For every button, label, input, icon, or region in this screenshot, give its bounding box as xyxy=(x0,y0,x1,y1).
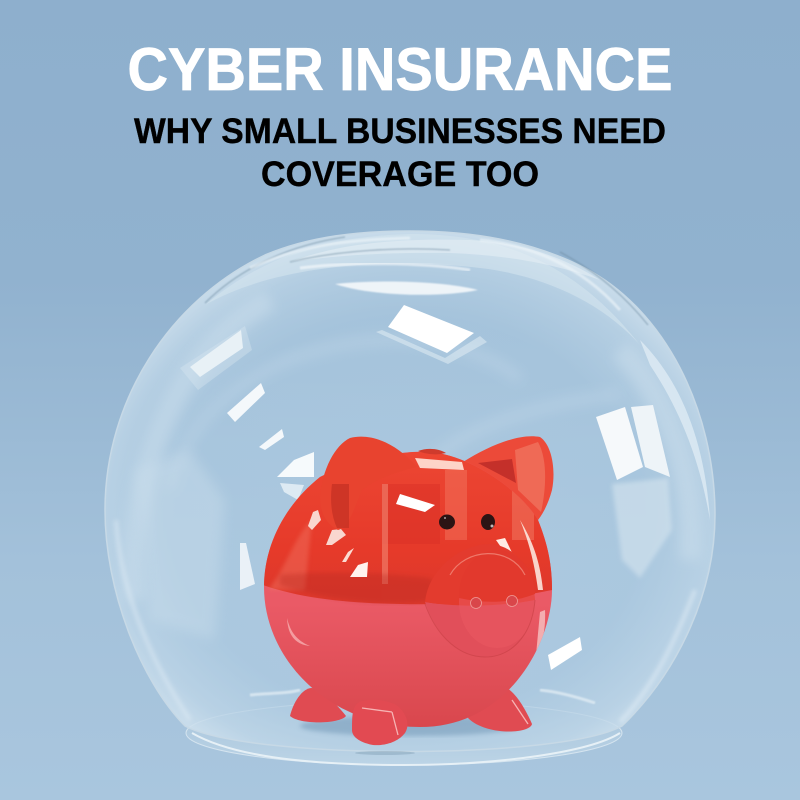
subtitle: WHY SMALL BUSINESSES NEED xyxy=(134,112,666,151)
glass top rim reflection xyxy=(205,234,640,345)
dome base plate xyxy=(186,701,622,765)
glass top dark rim detail xyxy=(205,237,648,325)
subtitle xyxy=(134,112,666,194)
window reflection: upper left xyxy=(190,330,243,377)
left side hazy reflections xyxy=(135,450,225,640)
right ear xyxy=(463,436,554,520)
right ear inner xyxy=(478,459,516,483)
glass inner wall shading xyxy=(134,300,691,600)
snout xyxy=(425,544,535,657)
low right reflection xyxy=(548,637,582,670)
title: CYBER INSURANCE xyxy=(128,36,672,103)
nostrils xyxy=(470,598,482,608)
window reflection: low left xyxy=(259,429,284,450)
eyes xyxy=(439,514,495,530)
glass dome xyxy=(105,231,715,765)
coin slot xyxy=(418,449,446,454)
window reflection: top xyxy=(388,305,474,353)
foot glints xyxy=(362,700,528,735)
left low reflection xyxy=(240,543,255,590)
subtitle: COVERAGE TOO xyxy=(261,155,539,194)
dome glass body xyxy=(105,231,715,752)
back feet xyxy=(290,685,532,732)
left ear xyxy=(320,437,417,530)
left ear inner reflection xyxy=(331,484,349,528)
base plate highlight rim xyxy=(192,733,620,765)
shadow xyxy=(300,716,520,736)
right edge highlight xyxy=(640,340,710,520)
glass top white highlight xyxy=(335,282,478,295)
pig body xyxy=(264,452,552,727)
front foot xyxy=(352,700,407,745)
top highlight stripe xyxy=(415,458,464,470)
body glints xyxy=(396,494,435,512)
piggy bank xyxy=(264,436,554,746)
interior arcs xyxy=(170,340,620,490)
window reflection: mid left xyxy=(227,383,265,422)
window reflection: right xyxy=(596,407,643,480)
upper body reflection xyxy=(264,452,552,604)
